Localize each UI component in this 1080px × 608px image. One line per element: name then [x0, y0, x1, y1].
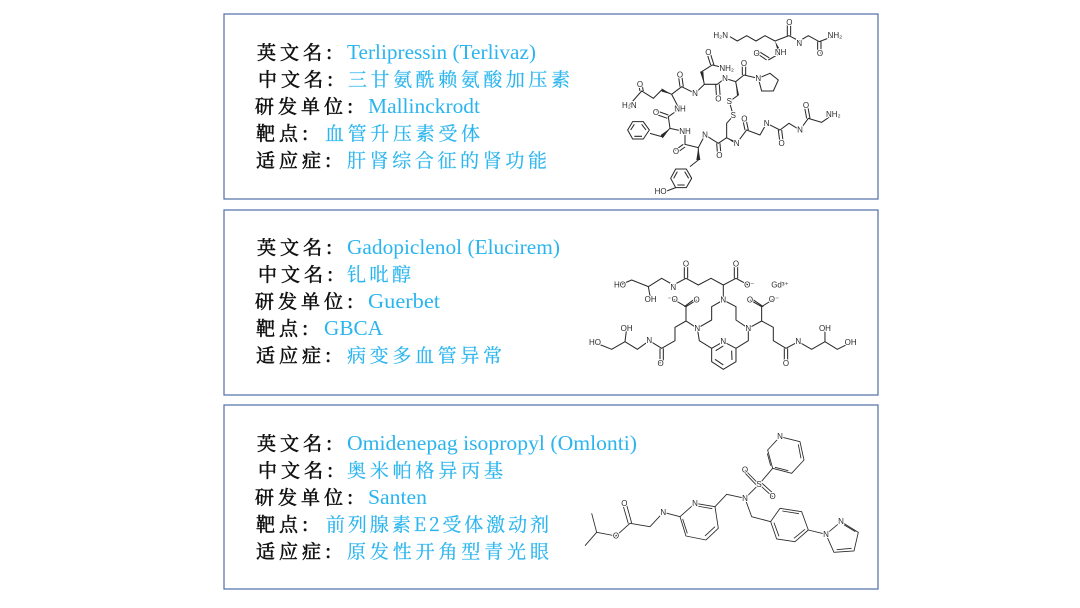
chart: Gadopiclenol structure: N: [720, 295, 726, 304]
chart: Omidenepag isopropyl structure: N: [823, 530, 829, 539]
text block: Omidenepag isopropyl details: 靶点:: [256, 510, 312, 537]
chart: Gadopiclenol structure: [589, 259, 857, 369]
text block: Gadopiclenol details: 研发单位:: [255, 287, 357, 314]
chart: Gadopiclenol structure: N: [795, 337, 801, 346]
chart: Gadopiclenol structure: OH: [621, 324, 633, 333]
chart: Terlipressin structure: O: [786, 18, 792, 27]
chart: Terlipressin structure: [622, 18, 842, 196]
chart: Gadopiclenol structure: O: [783, 359, 789, 368]
text block: Gadopiclenol details: Gadopiclenol (Elucirem): [347, 235, 560, 259]
chart: Gadopiclenol structure: OH: [819, 324, 831, 333]
text block: Terlipressin details: 英文名:: [257, 38, 336, 65]
chart: Gadopiclenol structure: HO: [614, 280, 626, 289]
text block: Terlipressin details: Mallinckrodt: [368, 94, 480, 118]
chart: Omidenepag isopropyl structure: O: [621, 499, 627, 508]
text block: Gadopiclenol details: 病变多血管异常: [347, 341, 502, 368]
chart: Gadopiclenol structure: OH: [845, 338, 857, 347]
chart: Gadopiclenol structure: N: [670, 283, 676, 292]
chart: Terlipressin structure: H₂N: [622, 101, 637, 110]
text block: Omidenepag isopropyl details: 奥米帕格异丙基: [347, 456, 503, 483]
text block: Terlipressin details: 靶点:: [256, 119, 312, 146]
text block: Terlipressin details: 三甘氨酰赖氨酸加压素: [348, 65, 570, 92]
chart: Omidenepag isopropyl structure: N: [777, 432, 783, 441]
chart: Terlipressin structure: O: [715, 94, 721, 103]
text block: Gadopiclenol details: 钆吡醇: [347, 260, 411, 287]
chart: Terlipressin structure: O: [705, 48, 711, 57]
text block: Omidenepag isopropyl details: Santen: [368, 485, 428, 509]
panel: Omidenepag isopropyl: [224, 405, 878, 589]
chart: Gadopiclenol structure: OH: [645, 295, 657, 304]
chart: Terlipressin structure: N: [702, 130, 708, 139]
chart: Gadopiclenol structure: O: [747, 295, 753, 304]
chart: Omidenepag isopropyl structure: S: [756, 480, 762, 489]
text block: Terlipressin details: 血管升压素受体: [325, 119, 480, 146]
panel: Terlipressin: [224, 14, 878, 199]
text block: Gadopiclenol details: GBCA: [324, 316, 384, 340]
chart: Terlipressin structure: NH: [775, 48, 787, 57]
text block: Terlipressin details: Terlipressin (Terlivaz): [347, 40, 536, 64]
chart: Terlipressin structure: NH₂: [719, 64, 734, 73]
chart: Gadopiclenol structure: N: [646, 336, 652, 345]
text block: Omidenepag isopropyl details: 前列腺素E2受体激动剂: [326, 510, 549, 537]
chart: Terlipressin structure: S: [727, 97, 732, 106]
chart: Terlipressin structure: O: [716, 151, 722, 160]
chart: Gadopiclenol structure: O⁻: [744, 280, 755, 289]
chart: Gadopiclenol structure: N: [694, 324, 700, 333]
text block: Gadopiclenol details: Guerbet: [368, 289, 440, 313]
chart: Gadopiclenol structure: O⁻: [769, 295, 779, 304]
text block: Gadopiclenol details: 适应症:: [256, 341, 335, 368]
text block: Terlipressin details: 肝肾综合征的肾功能: [347, 146, 547, 173]
text block: Terlipressin details: 适应症:: [256, 146, 335, 173]
chart: Gadopiclenol structure: ⁻O: [667, 295, 678, 304]
chart: Gadopiclenol structure: N: [720, 337, 726, 346]
chart: Omidenepag isopropyl structure: O: [613, 531, 619, 540]
panel: Gadopiclenol: [224, 210, 878, 395]
text block: Omidenepag isopropyl details: 英文名:: [257, 429, 336, 456]
text block: Omidenepag isopropyl details: Omidenepag isopropyl (Omlonti): [347, 431, 637, 455]
chart: Terlipressin structure: NH: [674, 104, 686, 113]
chart: Terlipressin structure: H₂N: [713, 31, 728, 40]
chart: Omidenepag isopropyl structure: [585, 432, 858, 552]
chart: Terlipressin structure: N: [797, 125, 803, 134]
text block: Gadopiclenol details: [255, 233, 560, 368]
chart: Terlipressin structure: N: [692, 89, 698, 98]
chart: Gadopiclenol structure: HO: [589, 338, 601, 347]
chart: Terlipressin structure: O: [754, 49, 760, 58]
chart: Gadopiclenol structure: O: [683, 259, 689, 268]
chart: Omidenepag isopropyl structure: O: [742, 465, 748, 474]
text block: Terlipressin details: 中文名:: [258, 65, 337, 92]
chart: Terlipressin structure: N: [734, 139, 740, 148]
text block: Omidenepag isopropyl details: 研发单位:: [255, 483, 357, 510]
chart: Terlipressin structure: O: [803, 101, 809, 110]
chart: Omidenepag isopropyl structure: N: [742, 494, 748, 503]
chart: Gadopiclenol structure: O: [694, 295, 700, 304]
text block: Terlipressin details: 研发单位:: [255, 92, 357, 119]
text block: Terlipressin details: [255, 38, 570, 173]
chart: Terlipressin structure: NH₂: [826, 110, 841, 119]
chart: Terlipressin structure: N: [764, 119, 770, 128]
chart: Terlipressin structure: O: [741, 114, 747, 123]
chart: Terlipressin structure: O: [637, 80, 643, 89]
text block: Omidenepag isopropyl details: 中文名:: [258, 456, 337, 483]
text block: Omidenepag isopropyl details: 原发性开角型青光眼: [347, 537, 549, 564]
text block: Gadopiclenol details: 中文名:: [258, 260, 337, 287]
chart: Terlipressin structure: O: [653, 108, 659, 117]
chart: Omidenepag isopropyl structure: N: [660, 508, 666, 517]
chart: Terlipressin structure: O: [741, 59, 747, 68]
chart: Terlipressin structure: NH: [679, 127, 691, 136]
chart: Terlipressin structure: N: [722, 74, 728, 83]
chart: Terlipressin structure: O: [779, 139, 785, 148]
chart: Terlipressin structure: N: [755, 74, 761, 83]
chart: Terlipressin structure: NH₂: [828, 31, 842, 40]
chart: Terlipressin structure: S: [731, 111, 736, 120]
text block: Omidenepag isopropyl details: [255, 429, 637, 564]
chart: Terlipressin structure: HO: [655, 187, 667, 196]
chart: Terlipressin structure: O: [817, 49, 823, 58]
text block: Gadopiclenol details: 靶点:: [256, 314, 312, 341]
chart: Terlipressin structure: O: [673, 147, 679, 156]
chart: Gadopiclenol structure: N: [745, 324, 751, 333]
chart: Omidenepag isopropyl structure: O: [770, 492, 776, 501]
chart: Terlipressin structure: O: [677, 70, 683, 79]
text block: Gadopiclenol details: 英文名:: [257, 233, 336, 260]
text block: Omidenepag isopropyl details: 适应症:: [256, 537, 335, 564]
chart: Gadopiclenol structure: O: [658, 359, 664, 368]
chart: Omidenepag isopropyl structure: N: [692, 499, 698, 508]
chart: Gadopiclenol structure: O: [733, 259, 739, 268]
chart: Terlipressin structure: N: [796, 39, 802, 48]
chart: Omidenepag isopropyl structure: N: [838, 517, 844, 526]
chart: Gadopiclenol structure: Gd³⁺: [771, 280, 789, 289]
